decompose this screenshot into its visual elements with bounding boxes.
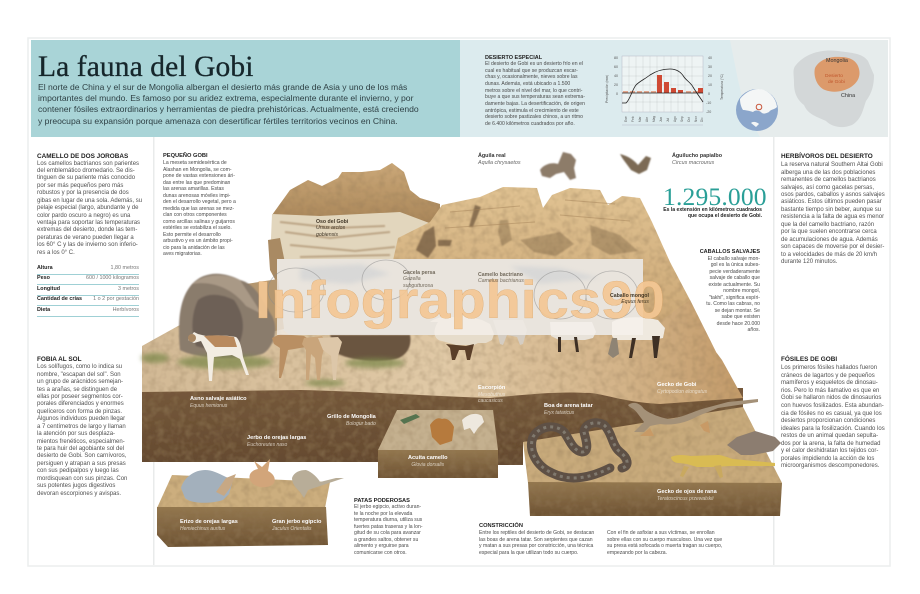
climate chart: 40 [614,74,618,78]
text: desierto especial: cual es habitual que se produzcan escar- [485,68,578,74]
climate chart: Mar [638,116,642,122]
label: acuita camello: Glovia dorsalis [411,462,444,468]
label: escorpion: Mesobuthus [478,392,505,398]
text: camello: los 60° C y las de invierno son inferio- [37,242,138,248]
label: acuita camello: Acuita camello [408,455,447,461]
text: pequeno gobi: Esto permite el desarrollo [163,232,221,238]
label: escorpion: caucasicus [478,398,503,404]
heading: fobia: FOBIA AL SOL [37,356,82,363]
label: camello bactriano [478,272,524,284]
label: jerbo de orejas largas: Euchoreutes naso [247,442,287,448]
reptile block [523,399,782,516]
text: fobia: mientos frenéticos, especialmen- [37,439,125,445]
bird: aguilucho papialbo [620,154,651,174]
text: camello: tinguen de su pariente más conocido [37,175,135,181]
intro text [38,82,419,126]
icon: wild ass [188,332,249,381]
text: fobia: nombre, "escapan del sol". Son [37,372,121,378]
icon: sand boa [532,423,627,478]
text: caballos salvajes: desde hace 20.000 [717,321,760,327]
text: herbivoros: alberga una de las dos poblaciones [781,170,875,176]
text: fobia: Algunos individuos pueden llegar [37,416,125,422]
heading: fosiles: FÓSILES DE GOBI [781,356,837,363]
text: herbivoros: osos pardos, caballos y asnos salvajes [781,192,885,198]
label: gecko de gobi [657,382,707,395]
text: caballos salvajes: se dejan montar. Se [715,308,760,314]
text: fobia: desierto de Gobi. Son carnívoros, [37,453,126,459]
text: pequeno gobi: como arcillas salinas y guijarros [163,218,235,224]
climate chart: -20 [706,110,711,114]
icon: scorpion [462,414,484,434]
table: camel data: 3 metros [118,286,139,292]
climate chart: 20 [708,74,712,78]
text: desierto especial: chas y, ocasionalmente, nieves sobre las [485,74,578,80]
text: constriccion 2: Con el fin de asfixiar a sus víctimas, se enrollan [607,530,715,536]
text: camello: ventaja para soportar las temperaturas [37,220,140,226]
label: erizo de orejas largas [180,519,238,532]
text: camello: del emblemático dromedario. Se dis- [37,168,135,174]
panel: title header [31,40,460,137]
climate chart: Sep [680,116,684,122]
text: constriccion 2: su presa está sofocada o muerta tragan su cuerpo, [607,543,722,549]
label: boa de arena: Boa de arena tatar [544,403,593,409]
text: caballos salvajes: pecie verdaderamente [709,269,760,275]
text: patas poderosas [354,504,423,556]
label: oso del gobi: gobiensis [316,232,338,238]
heading: caballos salvajes: CABALLOS SALVAJES [700,249,760,255]
text: pequeno gobi: pone de vastas extensiones ári- [163,173,235,179]
text: caballos salvajes: tu. Como las cabras, no [706,301,760,307]
text: pequeno gobi [163,160,236,257]
climate chart: Nov [694,116,698,122]
rodent block [157,459,344,547]
text: herbivoros: bastante tiempo sin beber, aunque su [781,207,881,213]
text: herbivoros: durante 120 minutos. [781,259,837,265]
text: caballos salvajes: El caballo salvaje mon- [708,256,760,262]
climate chart: Feb [631,116,635,122]
text: herbivoros: salvajes, así como gacelas persas, [781,185,874,191]
text: patas poderosas: te la noche por la elevada [354,511,412,517]
table: camel data: Dieta [37,307,50,313]
label: escorpion [478,385,505,404]
climate chart: Ene [624,116,628,122]
table: camel data: Longitud [37,286,60,292]
pale base behind watermark band [277,259,643,335]
label: gecko de ojos de rana [657,489,717,502]
text: caballos salvajes: años. [748,327,760,333]
label: aguila real: Águila real [478,153,506,159]
intro text: El norte de China y el sur de Mongolia albergan el desierto más grande de Asia y uno de los más [38,82,407,92]
panel: fosiles de gobi [781,355,885,469]
label: acuita camello [408,455,448,468]
table: camel data: 1,80 metros [111,265,139,271]
text: pequeno gobi: las arenas amarillas. Estas [163,186,224,192]
label: escorpion: Escorpión [478,385,505,391]
label: asno salvaje [190,396,247,409]
label: grillo de mongolia: Bologur bado [346,421,376,427]
text: pequeno gobi: aves migratorias. [163,251,202,257]
white watermark band [277,259,643,335]
text: fobia: sus potentes jugos digestivos [37,483,115,489]
climate chart: Oct [687,117,691,122]
text: desierto especial: buye a que sus temperaturas sean extrema- [485,94,585,100]
label: gecko de gobi: Gecko de Gobi [657,382,696,388]
heading: constriccion: CONSTRICCIÓN [479,522,523,528]
text: fosiles: Gobi se hallaron nidos de dinosaurios [781,395,881,401]
icon: long-eared hedgehog [181,470,233,503]
text: fosiles: Los primeros fósiles hallados fueron [781,365,877,371]
watermark text: Infographics90 [255,271,665,330]
intro text: importantes del mundo. Es famoso por su aridez extrema, especialmente durante el invierno, y por [38,93,413,103]
panel: herbivoros del desierto [781,152,885,265]
panel: fobia al sol [37,356,127,497]
label: caballo mongol [610,293,649,305]
text: herbivoros: to a velocidades de más de 20 km/h [781,252,877,258]
intro text: contener fósiles extraordinarios y herramientas de piedra prehistóricas. Actualmente, está creciendo [38,104,419,114]
icon: acuita camello solifuge [430,418,454,445]
label: grillo de mongolia: Grillo de Mongolia [327,414,376,420]
label: erizo de orejas largas: Erizo de orejas largas [180,519,238,525]
text: pequeno gobi: cio para la anidación de las [163,244,225,250]
text: desierto especial: metros sobre el nivel del mar, lo que contri- [485,88,582,94]
text: herbivoros: asiáticos. Estos últimos pueden pasar [781,199,882,205]
table: camel data [37,265,139,317]
text: fosiles: porales impidiendo la acción de los [781,456,874,462]
locator map of China and Mongolia: Desierto [825,73,843,79]
text: fobia: mordisquean con sus pinzas. Con [37,476,127,482]
panel: desierto especial [460,40,888,137]
text: patas poderosas: alimento y erguirse para [354,543,409,549]
text: herbivoros: resistencia a la falta de agua es menor [781,214,884,220]
text: caballos salvajes: "takhi", significa espíri- [709,295,760,301]
text: fobia: un grupo de arácnidos semejan- [37,379,123,385]
climate chart: 80 [614,56,618,60]
table: camel data: Herbívoros [113,307,139,313]
text: constriccion 1 [479,530,594,556]
table: camel data: 600 / 1000 kilogramos [86,275,139,281]
text: camello: gibas en lugar de una sola. Además, su [37,198,142,204]
label: camello bactriano: Camelus bactrianus [478,278,524,284]
locator map of China and Mongolia [730,40,888,137]
climate chart: Abr [645,116,649,122]
text: pequeno gobi: clan con otros componentes [163,212,227,218]
text: fosiles: cia de fósiles no es casual, ya que los [781,411,882,417]
icon: gazelles [272,334,342,380]
grey boulders [179,274,410,361]
text: desierto especial: damente bajas. La desertificación, de origen [485,101,585,107]
table: camel data: Peso [37,275,50,281]
climate chart: Dic [700,117,704,122]
text: camello: pelaje especial (largo, abundante y de [37,205,138,211]
climate chart: 40 [708,56,712,60]
text: caballos salvajes [706,256,760,333]
climate chart: Precipitación (mm) [605,75,609,103]
text: fosiles: cráneos de lagartos y de pequeños [781,373,875,379]
text: patas poderosas: gitud de su cola para avanzar [354,530,421,536]
pale strata slope [268,212,432,335]
text: caballos salvajes: salvaje de caballo que [710,275,760,281]
text: herbivoros: por la que suelen encontrarse cerca [781,229,877,235]
label: boa de arena [544,403,593,416]
sand surface [142,300,743,404]
Gobi area [814,57,860,92]
icon: wild horses [550,317,665,358]
locator map of China and Mongolia: Mongolia [826,58,848,64]
label: gecko de gobi: Cyrtopodion elongatus [657,389,707,395]
text: patas poderosas: temperatura diurna, utiliza sus [354,517,422,523]
sandstone cliff [392,187,716,352]
text: pequeno gobi: estériles se estabiliza el suelo. [163,225,232,231]
background rock stacks [272,163,440,230]
bird: aguila real [540,152,576,180]
caption: big number [663,207,762,219]
label: gacela persa: subgutturosa [403,283,433,289]
text: caballos salvajes: sabe que existen [721,314,760,320]
label: asno salvaje: Asno salvaje asiático [190,396,247,402]
climate chart: 0 [708,92,710,96]
label: camello bactriano: Camello bactriano [478,272,523,278]
text: desierto especial: antrópica, estimula el crecimiento de este [485,108,579,114]
label: gecko de ojos de rana: Teratoscincus przewalskii [657,496,714,502]
text: camello: peraturas de verano pueden llegar a [37,235,134,241]
cricket block [378,410,498,478]
vegetation [141,353,405,386]
intro text: y preocupa su expansión porque amenaza con desertificar fértiles territorios vecinos en China. [38,116,398,126]
label: oso del gobi: Ursus arctos [316,225,345,231]
text: fosiles [781,364,885,469]
text: camello [37,160,142,256]
text: fobia: porales diferenciados y enormes [37,401,124,407]
text: fobia: te para huir del agobiante sol del [37,446,124,452]
label: gacela persa [403,270,436,289]
label: aguilucho papialbo [672,152,722,166]
label: gacela persa: Gazella [403,276,421,282]
climate chart: Jul [666,118,670,122]
label: aguila real: Aquila chrysaetos [478,160,521,166]
icon: cricket [400,414,420,424]
label: caballo mongol: Equus ferus [621,299,649,305]
climate chart: 20 [614,83,618,87]
text: patas poderosas: fuertes patas traseras y la lon- [354,524,423,530]
text: fobia: persiguen y atrapan a sus presas [37,461,126,467]
label: aguilucho papialbo: Águilucho papialbo [672,153,722,159]
text: fobia: quelíceros con forma de pinzas. [37,409,122,415]
text: herbivoros: remanentes de camellos bactrianos [781,177,876,183]
heading: desierto especial: DESIERTO ESPECIAL [485,55,542,61]
label: gecko de ojos de rana: Gecko de ojos de rana [657,489,717,495]
text: fobia [37,364,127,497]
label: jerbo de orejas largas: Jerbo de orejas largas [247,435,306,441]
text: fosiles: ideales para la fosilización. Cuando los [781,426,885,432]
text: caballos salvajes: gol es la única subes- [711,262,760,268]
text: fobia: Los solífugos, como lo indica su [37,364,122,370]
text: fobia: tes a arañas, se distinguen de [37,386,117,392]
text: camello: robustos y por la presencia de dos [37,190,129,196]
text: fosiles: con huevos fosilizados. Esta abundan- [781,403,884,409]
label: caballo mongol: Caballo mongol [610,293,649,299]
label: aguilucho papialbo: Circus macrourus [672,160,714,166]
panel: camello de dos jorobas [37,153,142,256]
text: fobia: la atención por sus desplaza- [37,431,115,437]
text: fobia: ellas por poseer segmentos cor- [37,394,123,400]
text: fosiles: dos por la arena, la falta de humedad [781,441,880,447]
label: oso del gobi [316,219,348,238]
label: gran jerbo egipcio: Jaculus Orientalis [272,526,311,532]
climate chart [605,56,724,126]
text: constriccion 2 [607,530,722,556]
text: fosiles: mamíferos y esqueletos de dinosau- [781,380,878,386]
text: constriccion 1: especial para la que utilizan todo su cuerpo. [479,550,578,556]
text: pequeno gobi: arbustivo y es un ámbito propi- [163,238,233,244]
text: desierto especial [485,61,585,127]
climate chart: 30 [708,65,712,69]
text: fobia: a 7 centímetros de largo y llaman [37,424,126,430]
text: camello: Los camellos bactrianos son parientes [37,160,139,166]
text: desierto especial: de 6.400 kilómetros cuadrados por año. [485,121,575,127]
text: camello: color pardo oscuro a negro) es una [37,213,130,219]
label: boa de arena: Eryx tataricus [544,410,574,416]
climate chart: 60 [614,65,618,69]
text: pequeno gobi: medida que las arenas se mez- [163,206,234,212]
text: herbivoros: son capaces de moverse por el desier- [781,244,884,250]
label: erizo de orejas largas: Hemiechinus auritus [180,526,225,532]
label: gran jerbo egipcio [272,519,322,532]
climate chart: 0 [616,92,618,96]
label: gacela persa: Gacela persa [403,270,435,276]
text: caballos salvajes: nombre mongol, [723,288,760,294]
climate chart: Temperatura (°C) [720,74,724,100]
text: herbivoros [781,162,885,265]
title: La fauna del Gobi [38,51,254,83]
label: aguila real [478,152,521,166]
text: pequeno gobi: den el desarrollo vegetal, pero a [163,199,236,205]
text: herbivoros: que la del camello bactriano, razón [781,222,874,228]
climate chart: May [652,116,656,122]
heading: camello: CAMELLO DE DOS JOROBAS [37,153,128,160]
text: camello: extremas del desierto, donde las tem- [37,227,137,233]
big number: 1.295.000 [663,182,767,211]
icon: long-eared jerboa [249,459,275,487]
table: camel data: Cantidad de crías [37,296,82,302]
icon: globe [736,89,778,131]
table: camel data: Altura [37,265,53,271]
locator map of China and Mongolia: de Gobi [828,79,845,85]
text: constriccion 2: sobre ellas con su cuerpo musculoso. Una vez que [607,537,722,543]
text: herbivoros: La reserva natural Southern Altai Gobi [781,162,883,168]
text: patas poderosas: comunicarse con otros. [354,550,407,556]
text: pequeno gobi: Alashan en Mongolia, se com- [163,166,232,172]
label: asno salvaje: Equus hemionus [190,403,227,409]
text: constriccion 1: y matan a sus presas por constricción, una técnica [479,543,593,549]
table: camel data: 1 o 2 por gestación [93,296,139,302]
main soil block [142,388,743,465]
label: oso del gobi: Oso del Gobi [316,219,348,225]
text: pequeno gobi: dunas arenosas móviles impi- [163,192,230,198]
text: caballos salvajes: existe actualmente. Su [708,282,760,288]
text: fosiles: rios. Pero lo más llamativo es que en [781,388,879,394]
label: jerbo de orejas largas [247,435,306,448]
text: fosiles: restos de un animal quedan sepulta- [781,433,878,439]
label: grillo de mongolia [327,414,376,427]
text: desierto especial: dunas. Además, está ubicado a 1.500 [485,81,570,87]
text: pequeno gobi: das entre las que predominan [163,180,230,186]
text: patas poderosas: a grandes saltos, obtener su [354,537,418,543]
heading: patas poderosas: PATAS PODEROSAS [354,498,410,504]
text: fosiles: microorganismos descomponedores. [781,463,879,469]
text: camello: res a los 0° C. [37,250,75,256]
text: desierto especial: desierto sobre pastizales chinos, a un ritmo [485,114,583,120]
text: fobia: con sus pedipalpos y luego las [37,468,119,474]
text: constriccion 1: las boas de arena tatar. Son serpientes que cazan [479,537,593,543]
text: constriccion 1: Entre los reptiles del desierto de Gobi, se destacan [479,530,594,536]
text: patas poderosas: El jerbo egipcio, activo duran- [354,504,421,510]
text: pequeno gobi: La meseta semidesértica de [163,160,227,166]
climate chart: 10 [708,83,712,87]
heading: pequeno gobi: PEQUEÑO GOBI [163,153,208,159]
rock [727,431,781,455]
locator map of China and Mongolia: China [841,93,855,99]
icon: egyptian jerboa [292,470,344,498]
icon: gobi gecko [628,399,758,432]
caption: big number: Es la extensión en kilómetros cuadrados [663,207,762,213]
caption: big number: que ocupa el desierto de Gobi. [688,213,762,219]
climate chart: Ago [673,116,677,122]
label: gran jerbo egipcio: Gran jerbo egipcio [272,519,321,525]
icon: bactrian camels [430,314,527,360]
text: fobia: devoran escorpiones y avispas. [37,491,121,497]
heading: herbivoros: HERBÍVOROS DEL DESIERTO [781,153,873,160]
background sandstone block behind boulder [240,279,284,337]
text: constriccion 2: empezando por la cabeza. [607,550,667,556]
icon: frog-eyed gecko [671,455,775,467]
text: fosiles: y el calor deshidratan los tejidos cor- [781,448,878,454]
text: herbivoros: de acumulaciones de agua. Además [781,237,878,243]
text: camello: por ser más pequeños pero más [37,183,123,189]
text: desierto especial: El desierto de Gobi es un desierto frío en el [485,61,583,67]
climate chart: Jun [659,117,663,122]
text: fosiles: desiertos proporcionan condiciones [781,418,875,424]
climate chart: -10 [706,101,711,105]
